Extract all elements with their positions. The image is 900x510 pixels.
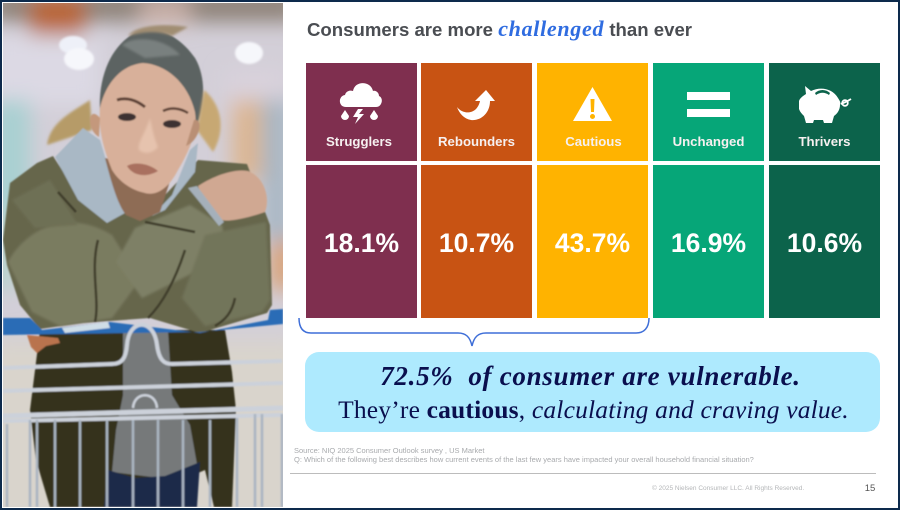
hood lining (55, 128, 125, 223)
callout subline: They’re cautious, calculating and craving value. (338, 395, 849, 424)
nose and mouth (139, 118, 158, 153)
title: Consumers are more challenged than ever (307, 16, 692, 41)
tile: Cautious (537, 63, 648, 161)
photo: worried woman leaning on a shopping cart (3, 3, 283, 507)
source note: Q: Which of the following best describes how current events of the last few years have impacted your overall household financial situation? (294, 455, 754, 464)
face (100, 63, 196, 194)
callout headline: 72.5% of consumer are vulnerable. (380, 361, 801, 391)
tile: Strugglers (306, 63, 417, 161)
tile: Rebounders (421, 63, 532, 161)
tile: Thrivers (769, 63, 880, 161)
tile: Unchanged (653, 63, 764, 161)
bracket grouping first three segments (298, 318, 650, 346)
value: Unchanged: 16.9% (671, 228, 746, 258)
tile: Strugglers: Strugglers (326, 134, 392, 149)
hand below rail (27, 335, 60, 353)
value: Cautious: 43.7% (555, 228, 630, 258)
icon: warning triangle (573, 87, 612, 121)
icon: storm cloud (340, 83, 382, 124)
value: Thrivers: 10.6% (787, 228, 862, 258)
icon: piggy bank (799, 86, 852, 123)
tile: Unchanged: Unchanged (673, 134, 744, 149)
icon: up-curving arrow (457, 90, 495, 120)
hair (100, 30, 203, 125)
neck (105, 158, 172, 221)
dark jacket lower body (30, 330, 236, 507)
callout: vulnerable consumers (305, 352, 880, 432)
cart handle (3, 309, 283, 335)
store background (0, 0, 300, 510)
source note (294, 446, 754, 464)
value: Rebounders (421, 165, 532, 318)
hand on arm (198, 170, 267, 221)
icon: equals sign (687, 92, 730, 117)
eyes and brows (117, 99, 145, 107)
value: Strugglers: 18.1% (324, 228, 399, 258)
tile: Cautious: Cautious (565, 134, 622, 149)
value: Unchanged (653, 165, 764, 318)
cart wires (3, 325, 283, 421)
copyright: © 2025 Nielsen Consumer LLC. All Rights Reserved. (652, 485, 804, 492)
value: Thrivers (769, 165, 880, 318)
value: Strugglers (306, 165, 417, 318)
value: Rebounders: 10.7% (439, 228, 514, 258)
tile: Rebounders: Rebounders (438, 134, 515, 149)
value: Cautious (537, 165, 648, 318)
source note: Source: NIQ 2025 Consumer Outlook survey , US Market (294, 446, 484, 455)
page number: 15 (865, 483, 875, 494)
tile: Thrivers: Thrivers (798, 134, 851, 149)
jacket and arms (3, 156, 272, 333)
